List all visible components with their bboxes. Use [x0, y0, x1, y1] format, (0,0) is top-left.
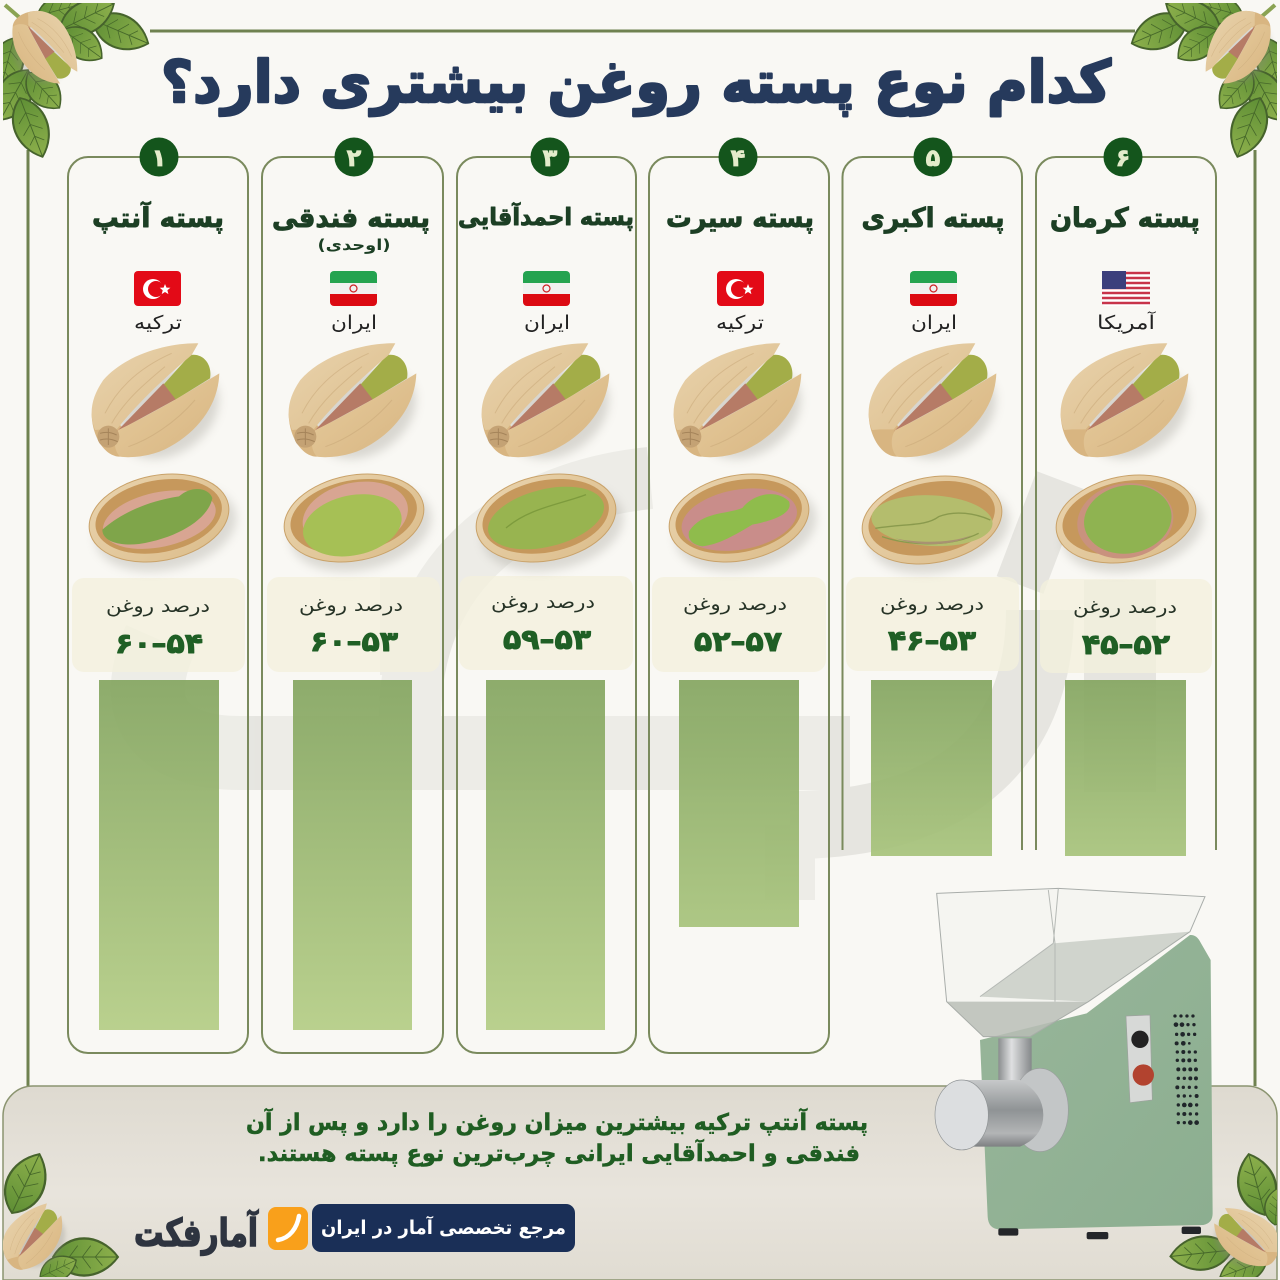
- rank badge: ۴: [731, 144, 745, 172]
- oil box: [846, 577, 1019, 671]
- bar: [99, 680, 219, 1030]
- rank badge: [140, 138, 178, 176]
- pistachio open: [276, 463, 439, 584]
- neck: [998, 1038, 1032, 1097]
- bar: [1065, 680, 1186, 856]
- flag: Turkey: [717, 271, 764, 306]
- flag: USA: [1102, 271, 1150, 306]
- flag: Iran: [523, 271, 570, 306]
- title: کدام نوع پسته روغن بیشتری دارد؟: [161, 48, 1111, 117]
- name: پسته کرمان: [1050, 203, 1200, 234]
- brand logo text: آمارفکت: [134, 1209, 259, 1255]
- oil percent: ۵۲–۵۷: [694, 625, 782, 658]
- rank badge: ۶: [1116, 144, 1130, 172]
- pistachio open: [661, 463, 824, 584]
- oil percent: ۵۹–۵۳: [503, 623, 591, 656]
- watermark logo: [148, 478, 1120, 900]
- country: ایران: [524, 312, 570, 334]
- machine feet: [998, 1227, 1201, 1239]
- oil label: درصد روغن: [106, 596, 210, 617]
- pistachio open: [1048, 464, 1211, 585]
- brand tagline pill: مرجع تخصصی آمار در ایران: [321, 1215, 566, 1239]
- column 6: Kerman: [1036, 138, 1216, 856]
- flag: Iran: [910, 271, 957, 306]
- card frame: [649, 157, 829, 1053]
- pistachio closed: [674, 343, 818, 478]
- card frame: [457, 157, 636, 1053]
- rank badge: [530, 138, 570, 176]
- conclusion text: [246, 1107, 868, 1167]
- flag: Turkey: [134, 271, 181, 306]
- card frame: [1036, 157, 1216, 850]
- corner ornament: bottom left: [0, 1146, 118, 1280]
- pistachio closed: [1061, 343, 1205, 478]
- brand logo icon: [268, 1207, 308, 1250]
- machine body: [980, 935, 1213, 1229]
- rank badge: ۳: [543, 144, 558, 172]
- name: پسته آنتپ: [92, 201, 224, 234]
- hopper: [937, 888, 1205, 1037]
- brand tagline pill: [312, 1204, 575, 1252]
- rank badge: ۱: [152, 144, 166, 172]
- rank badge: [1104, 138, 1142, 176]
- column 3: Ahmad Aghaei: [457, 138, 636, 1053]
- country: ایران: [911, 312, 957, 334]
- conclusion text: پسته آنتپ ترکیه بیشترین میزان روغن را دارد و پس از آن: [246, 1107, 868, 1136]
- bar: [486, 680, 605, 1030]
- country: ایران: [331, 312, 377, 334]
- rank badge: ۲: [347, 144, 362, 172]
- footer panel: [3, 1086, 1277, 1280]
- oil label: درصد روغن: [880, 594, 984, 615]
- country: آمریکا: [1097, 310, 1156, 334]
- oil box: [459, 576, 633, 670]
- oil percent: ۶۰–۵۳: [310, 625, 398, 658]
- rank badge: ۵: [926, 144, 940, 172]
- pistachio open: [468, 463, 631, 584]
- pistachio closed: [92, 343, 236, 478]
- card frame: [68, 157, 248, 1053]
- name note: (اوحدی): [318, 236, 390, 254]
- rank badge: [914, 138, 952, 176]
- column 1: Antep: [68, 138, 248, 1053]
- pistachio closed: [289, 343, 433, 478]
- rank badge: [334, 138, 374, 176]
- conclusion text: فندقی و احمدآقایی ایرانی چرب‌ترین نوع پسته هستند.: [258, 1138, 860, 1167]
- pistachio closed: [482, 343, 626, 478]
- card frame: [262, 157, 443, 1053]
- oil percent: ۴۵–۵۲: [1082, 628, 1170, 661]
- oil percent: ۶۰–۵۴: [115, 627, 203, 660]
- name: پسته سیرت: [666, 203, 814, 234]
- flag: Iran: [330, 271, 377, 306]
- control plate: [1126, 1015, 1154, 1103]
- name: پسته احمدآقایی: [458, 202, 634, 231]
- column 5: Akbari: [842, 138, 1022, 856]
- rank badge: [718, 138, 758, 176]
- corner ornament: top left: [0, 0, 155, 163]
- corner ornament: top right: [1125, 0, 1280, 163]
- name: پسته اکبری: [862, 203, 1004, 234]
- column 4: Sirt: [649, 138, 829, 1053]
- column 2: Fandoghi: [262, 138, 443, 1053]
- oil label: درصد روغن: [299, 595, 403, 616]
- country: ترکیه: [134, 312, 182, 334]
- oil press machine: [935, 888, 1213, 1239]
- oil label: درصد روغن: [1073, 597, 1177, 618]
- oil percent: ۴۶–۵۳: [888, 624, 976, 657]
- bar: [293, 680, 412, 1030]
- name: پسته فندقی: [272, 203, 430, 234]
- grinder cap: [935, 1080, 988, 1150]
- pistachio closed: [869, 343, 1013, 478]
- vent grille: [1173, 1014, 1199, 1125]
- oil label: درصد روغن: [491, 592, 595, 613]
- oil box: [72, 578, 245, 672]
- bar: [871, 680, 992, 856]
- grinder barrel: [962, 1080, 1043, 1147]
- pistachio open: [81, 463, 244, 584]
- corner ornament: bottom right: [1169, 1149, 1280, 1280]
- oil label: درصد روغن: [683, 594, 787, 615]
- country: ترکیه: [716, 312, 764, 334]
- outer frame: [28, 31, 1255, 1086]
- oil box: [652, 577, 826, 672]
- card frame: [842, 157, 1022, 850]
- grinder flange: [1012, 1068, 1068, 1152]
- pistachio open: [854, 465, 1017, 586]
- bar: [679, 680, 799, 927]
- oil box: [267, 577, 440, 672]
- oil box: [1040, 579, 1212, 673]
